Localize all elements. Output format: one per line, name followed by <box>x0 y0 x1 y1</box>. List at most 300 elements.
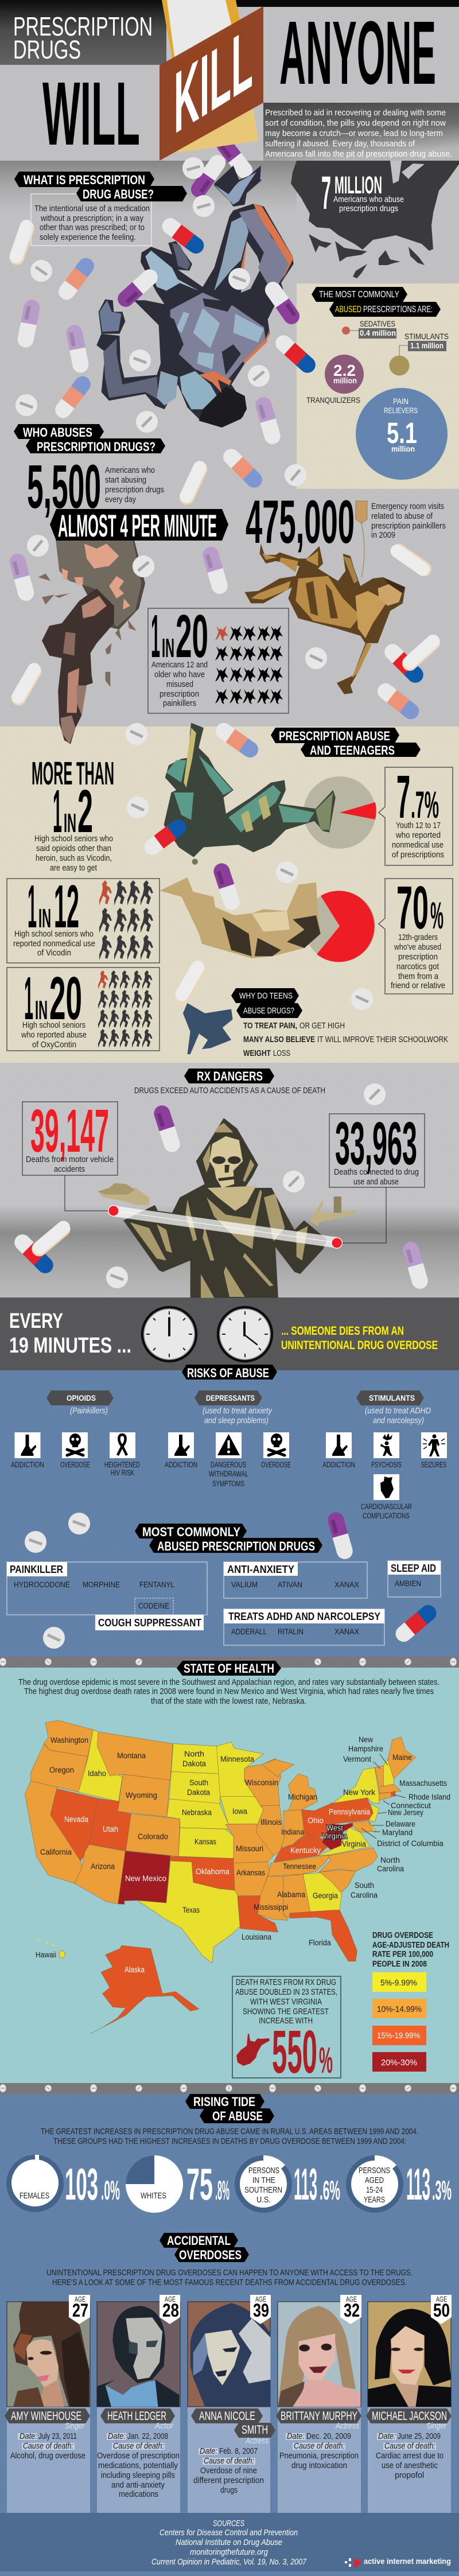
card: Heath Ledger: Jan. 22, 2008 <box>127 2432 168 2441</box>
illustration: small falling figure <box>183 1003 233 1054</box>
risk column: depressants: OVERDOSE <box>261 1460 291 1469</box>
stat box: 7.7 percent youth: Youth 12 to 17 <box>396 821 441 830</box>
stat box: 70 percent: friend or relative <box>391 981 445 990</box>
drug box: painkiller and cough suppressant <box>7 1562 207 1630</box>
card: Anna Nicole Smith: Cause of death: <box>204 2457 254 2466</box>
stat box: 1 in 20 seniors: IN <box>35 995 48 1025</box>
pills over clock man and IV man <box>128 541 444 686</box>
heading: prescription abuse and teenagers: PRESCRIPTION ABUSE <box>279 729 390 743</box>
pictogram: 1 of 20 figures <box>215 625 283 704</box>
heading: most commonly abused prescription drugs: ABUSED PRESCRIPTION DRUGS <box>157 1539 315 1553</box>
age tag: 32 <box>344 2300 360 2321</box>
drug box: anti-anxiety: VALIUM <box>231 1580 258 1589</box>
heading: most commonly abused prescription drugs <box>135 1524 322 1553</box>
age tag: 50 <box>433 2300 450 2321</box>
card: Brittany Murphy: Date: <box>287 2432 305 2441</box>
text: 39,147 <box>30 1097 109 1165</box>
card: Anna Nicole Smith: ANNA NICOLE <box>199 2410 255 2423</box>
stat box: 7.7 percent youth: who reported <box>395 831 441 840</box>
card: Heath Ledger: medications, potentially <box>98 2461 178 2470</box>
stat box: 39,147 motor vehicle deaths: accidents <box>54 1165 85 1174</box>
heading: most commonly abused prescription drugs: MOST COMMONLY <box>142 1525 240 1539</box>
card: Anna Nicole Smith: Overdose of nine <box>200 2466 257 2476</box>
drug box: painkiller and cough suppressant: MORPHINE <box>83 1580 120 1589</box>
age tag <box>340 2295 361 2324</box>
map state labels: Wyoming <box>126 1791 157 1800</box>
logo: active internet marketing: active internet marketing <box>364 2557 451 2566</box>
map state labels: Utah <box>103 1825 118 1833</box>
chart: aged 15-24 113.3 percent: PERSONS <box>359 2166 390 2175</box>
stat box: 1 in 12 seniors: 12 <box>54 873 79 941</box>
heading: rx dangers: DRUGS EXCEED AUTO ACCIDENTS AS A CAUSE OF DEATH <box>134 1086 325 1095</box>
callout: west virginia 550 percent: 550 <box>272 2018 317 2086</box>
stat: 475,000: related to abuse of <box>371 512 433 521</box>
heading: rx dangers <box>134 1069 325 1095</box>
drug box: painkiller and cough suppressant: CODEINE <box>138 1602 169 1610</box>
definition box: The intentional use of a medication <box>34 204 150 213</box>
card: Michael Jackson: propofol <box>395 2471 424 2480</box>
card: Michael Jackson: use of anesthetic <box>382 2461 438 2470</box>
card: Anna Nicole Smith: Feb. 8, 2007 <box>219 2447 258 2456</box>
map state labels: Dakota <box>182 1759 206 1768</box>
card: Heath Ledger: Actor <box>154 2422 174 2431</box>
pills over the grey-suit figure <box>114 215 319 391</box>
icon: overdose <box>263 1432 289 1458</box>
heading: prescription drugs: PRESCRIPTION <box>13 11 153 41</box>
definition box: other than was prescribed; or to <box>40 223 145 232</box>
pain relievers: million <box>391 444 415 453</box>
heading: rising tide of abuse: RISING TIDE <box>193 2095 255 2109</box>
pie chart: 7.7 percent <box>304 776 376 849</box>
map state labels: Minnesota <box>220 1755 254 1763</box>
map state labels: Michigan <box>288 1793 317 1801</box>
map state labels: Kansas <box>195 1837 216 1846</box>
drug box: treats ADHD and narcolepsy <box>224 1609 384 1645</box>
stat box: 33,963 drug deaths: use and abuse <box>353 1178 399 1187</box>
title: WILL <box>42 64 140 164</box>
chart: southern persons 113.6 percent: IN THE <box>252 2176 275 2185</box>
map legend: 20%-30% <box>381 2058 417 2068</box>
pictogram: 1 of 12 figures <box>99 880 153 960</box>
map state labels: Massachusetts <box>399 1779 447 1788</box>
stat box: 70 percent <box>379 874 453 994</box>
definition box: without a prescription; in a way <box>40 214 144 223</box>
connector lines to syringe <box>65 1175 386 1249</box>
heading: prescription abuse and teenagers <box>271 728 421 757</box>
stat: more than 1 in 2: heroin, such as Vicodin, <box>36 854 112 863</box>
US map silhouette with 7 million stat: Americans who abuse <box>333 195 404 204</box>
stat: more than 1 in 2: IN <box>64 808 76 838</box>
stat box: 70 percent: them from a <box>398 972 439 981</box>
tranquilizers: million <box>333 376 357 385</box>
drug box: painkiller and cough suppressant: COUGH SUPPRESSANT <box>98 1617 201 1629</box>
risk column: stimulants: CARDIOVASCULAR <box>361 1502 412 1511</box>
stat box: 1 in 12 seniors <box>7 873 160 963</box>
icon: overdose <box>62 1432 88 1458</box>
card: Michael Jackson: Cause of death: <box>384 2442 435 2451</box>
why do teens abuse drugs: OR GET HIGH <box>299 1021 345 1031</box>
heading: accidental overdoses <box>160 2233 249 2262</box>
card: Heath Ledger: Overdose of prescription <box>97 2451 180 2461</box>
sources: monitoringthefuture.org <box>190 2548 268 2557</box>
stat: more than 1 in 2: are easy to get <box>50 864 97 873</box>
map legend: 10%-14.99% <box>377 2004 422 2014</box>
icon: west virginia <box>236 2034 270 2066</box>
stat: 5,500: every day <box>105 495 137 504</box>
stat: 475,000: Emergency room visits <box>371 502 444 511</box>
panel: most commonly abused prescriptions: THE MOST COMMONLY <box>319 290 399 300</box>
divider strip tablets <box>0 1657 457 2093</box>
stat box: 1 in 20 seniors: of OxyContin <box>32 1040 76 1050</box>
heading: rising tide of abuse: OF ABUSE <box>212 2109 263 2123</box>
stat box: 1 in 12 seniors: reported nonmedical use <box>13 939 95 949</box>
stat box: 1 in 20 Americans: painkillers <box>163 699 196 708</box>
callout: west virginia 550 percent: INCREASE WITH <box>259 2016 313 2026</box>
risk column: stimulants: (used to treat ADHD <box>365 1406 431 1416</box>
risk column: opioids: HEIGHTENED <box>104 1460 140 1469</box>
callout: west virginia 550 percent: ABUSE DOUBLED IN 23 STATES, <box>235 1988 337 1997</box>
drug box: painkiller and cough suppressant: PAINKILLER <box>10 1564 63 1575</box>
age tag <box>250 2295 271 2324</box>
card: Heath Ledger <box>97 2295 180 2513</box>
card: Michael Jackson: June 25, 2009 <box>398 2432 441 2441</box>
map state labels: Virginia <box>342 1840 366 1848</box>
map state labels: Carolina <box>377 1864 404 1873</box>
portrait <box>97 2306 179 2407</box>
risk column: depressants: and sleep problems) <box>204 1416 269 1425</box>
card: Michael Jackson: Singer <box>426 2422 447 2431</box>
panel: most commonly abused prescriptions: PRESCRIPTIONS ARE: <box>363 305 433 314</box>
panel: every 19 minutes: EVERY <box>9 1309 63 1332</box>
pain relievers <box>356 388 448 480</box>
map state labels: Pennsylvania <box>329 1808 370 1816</box>
icon: addiction <box>15 1432 40 1458</box>
age tag: AGE <box>346 2295 357 2303</box>
chart: aged 15-24 113.3 percent: AGED <box>365 2176 384 2185</box>
stat: 475,000: prescription painkillers <box>371 522 446 531</box>
teen section pills <box>122 720 376 1013</box>
illustration: man falling through clock <box>38 539 145 744</box>
card: Anna Nicole Smith: different prescription <box>193 2476 264 2485</box>
heading: prescription drugs <box>13 11 153 64</box>
card: Anna Nicole Smith: Actress <box>245 2437 269 2446</box>
stat box: 33,963 drug deaths: Deaths connected to drug <box>334 1168 419 1177</box>
illustration: falling man in grey suit <box>96 165 294 428</box>
card: Anna Nicole Smith: drugs <box>220 2486 238 2495</box>
why do teens abuse drugs: TO TREAT PAIN, <box>243 1021 297 1031</box>
why do teens abuse drugs <box>183 988 448 1058</box>
heading: rx dangers: RX DANGERS <box>197 1069 263 1083</box>
intro text panel <box>263 103 459 161</box>
map state labels: Rhode Island <box>409 1793 450 1801</box>
age tag: 27 <box>72 2300 88 2321</box>
map state labels: Idaho <box>88 1769 106 1778</box>
card: Brittany Murphy: Dec. 20, 2009 <box>306 2432 351 2441</box>
stat box: 70 percent: prescription <box>398 953 438 962</box>
panel: every 19 minutes: ... SOMEONE DIES FROM AN <box>281 1324 404 1338</box>
chart: southern persons 113.6 percent <box>235 2155 340 2213</box>
stat box: 39,147 motor vehicle deaths: Deaths from motor vehicle <box>26 1155 114 1164</box>
map state labels: Carolina <box>351 1891 378 1899</box>
card: Brittany Murphy <box>276 2295 361 2513</box>
stat: 5,500: 5,500 <box>27 452 101 521</box>
map state labels: Wisconsin <box>245 1778 278 1787</box>
callout: west virginia 550 percent: WITH WEST VIRGINIA <box>250 1998 322 2007</box>
stat box: 1 in 20 Americans: misused <box>166 680 193 689</box>
blue section pills <box>22 1510 439 1652</box>
stat box: 39,147 motor vehicle deaths <box>22 1097 118 1175</box>
heading: prescription abuse and teenagers: AND TEENAGERS <box>310 743 395 757</box>
drug box: sleep aid: AMBIEN <box>395 1579 421 1588</box>
risk column: depressants: (used to treat anxiety <box>203 1406 273 1416</box>
icon: withdrawal warning <box>216 1432 242 1458</box>
why do teens abuse drugs: WEIGHT <box>243 1049 271 1058</box>
callout: west virginia 550 percent: SHOWING THE GREATEST <box>243 2007 329 2016</box>
map state labels: Oregon <box>49 1766 74 1774</box>
title <box>0 0 459 164</box>
heading: what is prescription drug abuse <box>14 172 187 201</box>
icon: HIV ribbon <box>110 1432 135 1458</box>
why do teens abuse drugs: MANY ALSO BELIEVE <box>243 1035 315 1044</box>
stat: 475,000: in 2009 <box>371 531 395 540</box>
map state labels: Mississippi <box>254 1903 288 1911</box>
chart: southern persons 113.6 percent: 113 <box>294 2159 317 2209</box>
sources: Centers for Disease Control and Prevention <box>160 2528 298 2538</box>
icon: heart <box>374 1474 399 1500</box>
map state labels: California <box>40 1848 72 1856</box>
stat box: 1 in 20 Americans: 1 <box>151 603 160 670</box>
drug box: sleep aid: SLEEP AID <box>391 1563 436 1574</box>
stat box: 1 in 12 seniors: High school seniors who <box>14 930 94 939</box>
stat: more than 1 in 2: 1 <box>53 778 62 845</box>
map state labels: New Jersey <box>388 1808 423 1817</box>
panel: every 19 minutes <box>9 1307 438 1361</box>
sources: SOURCES <box>213 2519 244 2528</box>
risk column: opioids <box>11 1390 140 1477</box>
stat box: 70 percent: 12th-graders <box>398 933 438 942</box>
illustration: falling teen boy <box>164 723 336 865</box>
map state labels: Georgia <box>313 1891 338 1900</box>
risk column: depressants: ADDICTION <box>165 1460 197 1469</box>
map state labels: New York <box>343 1788 375 1797</box>
stat box: 1 in 20 Americans: IN <box>162 633 174 663</box>
map state labels: Hampshire <box>348 1744 383 1753</box>
card: Heath Ledger: including sleeping pills <box>101 2471 175 2480</box>
card: Heath Ledger: medications <box>119 2490 158 2499</box>
map state labels: Vermont <box>343 1755 371 1763</box>
map legend: 5%-9.99% <box>380 1978 417 1988</box>
stat: 5,500: prescription drugs <box>105 485 164 495</box>
map state labels: Arkansas <box>236 1868 265 1877</box>
card: Amy Winehouse: Cause of death: <box>23 2442 73 2451</box>
portrait <box>13 2302 90 2407</box>
US choropleth map <box>25 1720 415 2034</box>
US map silhouette with 7 million stat: prescription drugs <box>339 204 398 213</box>
age tag: 28 <box>162 2300 179 2321</box>
drug box: anti-anxiety: ANTI-ANXIETY <box>227 1564 294 1575</box>
chart: females 103 percent: FEMALES <box>20 2192 49 2201</box>
drug box: anti-anxiety: ATIVAN <box>278 1580 302 1589</box>
risk column: depressants: DANGEROUS <box>211 1460 246 1469</box>
stat: more than 1 in 2: High school seniors who <box>34 834 113 844</box>
map state labels: Alabama <box>277 1890 305 1899</box>
card: Brittany Murphy: BRITTANY MURPHY <box>281 2410 357 2423</box>
chart: females 103 percent: 103 <box>65 2159 98 2209</box>
panel: every 19 minutes: 19 MINUTES ... <box>9 1334 131 1358</box>
stat box: 1 in 20 Americans: 20 <box>176 603 208 670</box>
heading: who abuses prescription drugs: PRESCRIPTION DRUGS? <box>37 440 155 454</box>
risk column: depressants: DEPRESSANTS <box>206 1393 255 1402</box>
stat box: 1 in 20 Americans: prescription <box>160 690 199 699</box>
map state labels: West <box>326 1824 343 1832</box>
logo: active internet marketing <box>345 2557 451 2568</box>
card: Brittany Murphy: Cause of death: <box>294 2442 345 2451</box>
pie chart: 70 percent <box>304 891 375 962</box>
card: Michael Jackson <box>366 2295 452 2513</box>
map state labels: Nevada <box>64 1815 88 1824</box>
heading: accidental overdoses: ACCIDENTAL <box>167 2233 231 2248</box>
card: Michael Jackson: Cardiac arrest due to <box>376 2451 444 2461</box>
map state labels: North <box>184 1750 204 1758</box>
icon: psychosis <box>374 1432 399 1458</box>
stat box: 70 percent: who've abused <box>394 943 441 952</box>
intro text panel: may become a crutch—or worse, lead to long-term <box>265 129 443 138</box>
map state labels: Tennessee <box>283 1862 316 1871</box>
callout: west virginia 550 percent: DEATH RATES FROM RX DRUG <box>236 1978 336 1987</box>
map state labels: Iowa <box>232 1807 247 1816</box>
stat: 5,500: Americans who <box>105 466 155 475</box>
risk column: stimulants: SEIZURES <box>421 1460 446 1469</box>
map state labels: New <box>359 1735 373 1744</box>
risk column: stimulants: STIMULANTS <box>369 1393 415 1402</box>
why do teens abuse drugs: LOSS <box>273 1049 290 1058</box>
map state labels: Ohio <box>308 1816 324 1825</box>
US map silhouette with 7 million stat: 7 <box>321 167 331 219</box>
heading: prescription drugs: DRUGS <box>13 35 81 64</box>
heading: who abuses prescription drugs <box>14 424 165 454</box>
map state labels: Florida <box>309 1938 331 1947</box>
risk column: depressants: SYMPTOMS <box>212 1479 244 1488</box>
risk column: opioids: OVERDOSE <box>60 1460 90 1469</box>
stat box: 1 in 20 seniors: who reported abuse <box>21 1031 87 1040</box>
card: Amy Winehouse: Date: <box>20 2432 37 2441</box>
definition box: solely experience the feeling. <box>40 233 136 242</box>
heading: rising tide of abuse <box>185 2094 274 2123</box>
illustration: falling pills, upper section <box>7 134 422 722</box>
sources: Current Opinion in Pediatric, Vol. 19, No. 3, 2007 <box>151 2558 307 2567</box>
map state labels: Hawaii <box>36 1951 56 1959</box>
risk column: depressants: WITHDRAWAL <box>209 1470 248 1478</box>
heading: who abuses prescription drugs: WHO ABUSES <box>23 425 92 440</box>
map state labels: South <box>189 1778 208 1787</box>
pictogram: 1 of 20 figures <box>98 970 153 1048</box>
drug box: treats ADHD and narcolepsy: TREATS ADHD AND NARCOLEPSY <box>228 1611 380 1622</box>
map state labels: District of Columbia <box>377 1839 444 1848</box>
age tag <box>160 2295 180 2324</box>
card: Anna Nicole Smith: Date: <box>200 2447 217 2456</box>
stat box: 7.7 percent youth: of prescriptions <box>392 850 444 860</box>
age tag: AGE <box>165 2295 176 2303</box>
pain relievers: RELIEVERS <box>384 406 418 415</box>
risk column: depressants <box>165 1390 291 1488</box>
age tag: AGE <box>255 2295 266 2303</box>
stat: more than 1 in 2 <box>32 755 114 873</box>
tranquilizers <box>306 355 364 405</box>
icon: addiction <box>326 1432 352 1458</box>
stat box: 70 percent: narcotics got <box>396 962 439 972</box>
stat box: 1 in 20 seniors: High school seniors <box>22 1021 85 1030</box>
map state labels: Louisiana <box>242 1933 271 1941</box>
card: Anna Nicole Smith <box>188 2295 275 2513</box>
banner: almost 4 per minute <box>50 508 228 543</box>
KILL panel <box>160 6 263 161</box>
tranquilizers: 2.2 <box>333 362 356 379</box>
intro text panel: Prescribed to aid in recovering or dealing with some <box>265 108 446 118</box>
stat box: 1 in 20 Americans: older who have <box>154 670 205 679</box>
text: .0% <box>101 2175 120 2205</box>
card: Amy Winehouse: Alcohol, drug overdose <box>10 2451 85 2461</box>
card: Heath Ledger: Cause of death: <box>113 2442 164 2451</box>
portrait <box>190 2303 270 2407</box>
chart: whites 75.8 percent <box>126 2155 230 2213</box>
sources <box>151 2519 307 2567</box>
callout: west virginia 550 percent <box>232 1976 341 2086</box>
heading: state of health: STATE OF HEALTH <box>184 1661 274 1676</box>
stat box: 1 in 12 seniors: IN <box>38 903 51 933</box>
map state labels: Colorado <box>138 1832 168 1841</box>
drug box: treats ADHD and narcolepsy: XANAX <box>334 1627 359 1636</box>
card: Brittany Murphy: Pneumonia, prescription <box>279 2451 359 2461</box>
risk column: opioids: HIV RISK <box>111 1468 134 1477</box>
stat box: 1 in 20 seniors: 20 <box>49 965 82 1032</box>
intro text panel: suffering if abused. Every day, thousands of <box>265 139 415 149</box>
stat box: 7.7 percent youth: 7 <box>396 763 410 831</box>
chart: aged 15-24 113.3 percent: YEARS <box>364 2196 385 2205</box>
pain relievers: 5.1 <box>387 417 417 449</box>
drug box: anti-anxiety: XANAX <box>334 1580 359 1589</box>
map state labels: Delaware <box>386 1820 415 1828</box>
map legend <box>372 1931 449 2072</box>
portrait <box>278 2306 361 2407</box>
card: Heath Ledger: Date: <box>108 2432 126 2441</box>
map state labels: Virginia <box>322 1832 347 1840</box>
map legend: RATE PER 100,000 <box>372 1950 433 1959</box>
heading: accidental overdoses: OVERDOSES <box>179 2248 242 2262</box>
sedatives: SEDATIVES <box>360 319 395 328</box>
heading: what is prescription drug abuse: DRUG ABUSE? <box>83 187 154 201</box>
heading: risks of abuse: RISKS OF ABUSE <box>187 1366 269 1380</box>
drug box: anti-anxiety <box>224 1562 367 1598</box>
map state labels: Indiana <box>281 1828 304 1836</box>
clock: nineteen minutes later <box>218 1307 272 1361</box>
map state labels: South <box>355 1881 374 1890</box>
stat box: 7.7 percent youth: nonmedical use <box>392 841 444 850</box>
map legend: 15%-19.99% <box>377 2031 420 2041</box>
stat box: 1 in 12 seniors: 1 <box>28 873 37 941</box>
callout: west virginia 550 percent: % <box>319 2039 333 2081</box>
clock: start <box>142 1307 196 1361</box>
risk column: stimulants: PSYCHOSIS <box>371 1460 402 1469</box>
drug box: sleep aid <box>388 1561 441 1597</box>
chart: southern persons 113.6 percent: PERSONS <box>248 2166 279 2175</box>
stat box: 1 in 20 seniors: 1 <box>24 965 33 1032</box>
risk column: opioids: ADDICTION <box>11 1460 44 1469</box>
chart: southern persons 113.6 percent: SOUTHERN <box>244 2186 282 2195</box>
text: .8% <box>215 2175 230 2205</box>
illustration: falling teen girl <box>160 877 321 958</box>
card: Amy Winehouse: AMY WINEHOUSE <box>11 2410 81 2423</box>
card: Amy Winehouse: July 23, 2011 <box>38 2432 77 2441</box>
